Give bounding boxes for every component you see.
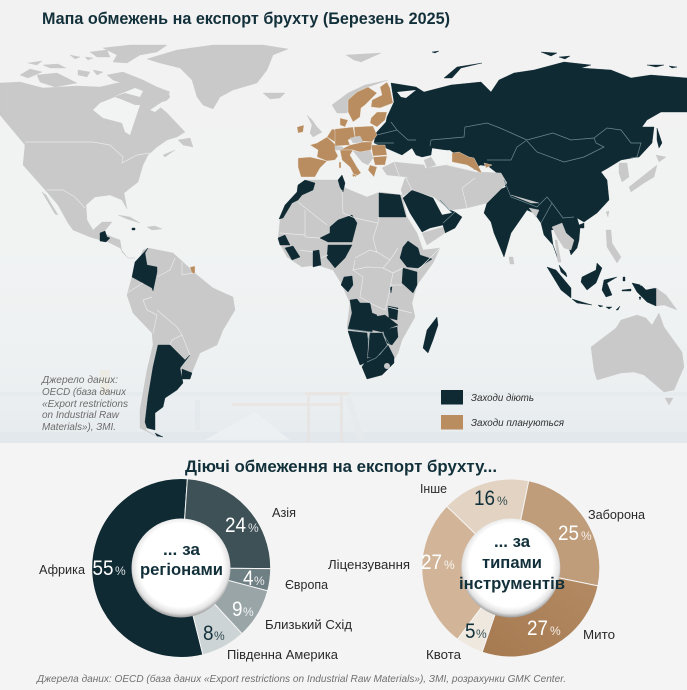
value 27% duty: 27 [527, 617, 548, 640]
region: Africa [278, 180, 440, 379]
value 16%: % [497, 494, 508, 508]
region: small gray enclaves [335, 136, 363, 150]
value 16% [474, 487, 508, 510]
segment: Other 16% [447, 479, 529, 568]
region: Asia gray [382, 155, 684, 405]
center label: інструментів [459, 575, 565, 593]
category labels: Мито [583, 628, 615, 642]
category labels: Азія [272, 506, 296, 520]
donut chart: by regions [39, 478, 353, 662]
value 55% [92, 557, 126, 580]
value 24%: 24 [225, 514, 246, 537]
value 24%: % [248, 521, 259, 535]
segment: Duty 27% [482, 568, 598, 657]
map source note: OECD (база даних [42, 386, 127, 398]
center label: типами [482, 554, 542, 572]
value 8%: 8 [203, 622, 214, 645]
category labels [328, 482, 645, 662]
value 27% licensing: % [444, 558, 455, 572]
value 27% licensing: 27 [421, 551, 442, 574]
map source note: on Industrial Raw [42, 409, 120, 421]
segment: Asia 24% [181, 479, 271, 569]
value 9%: % [243, 605, 254, 619]
value 4%: 4 [243, 567, 254, 590]
value 5% [465, 620, 487, 643]
segment: Ban 25% [511, 481, 600, 586]
center label: ... за [494, 533, 531, 551]
segment: Licensing 27% [422, 506, 511, 639]
value 27% duty [527, 617, 561, 640]
background [0, 0, 687, 443]
segment: Europe 4% [181, 568, 271, 591]
center label: регіонами [140, 561, 223, 579]
center label: ... за [163, 541, 201, 559]
port photo backdrop [0, 370, 687, 443]
value 4%: % [254, 574, 265, 588]
region: North America [0, 45, 288, 258]
category labels: Африка [39, 563, 85, 577]
value 5%: % [476, 627, 487, 641]
value 8%: % [214, 629, 225, 643]
center label [459, 533, 565, 593]
lesotho [384, 363, 390, 369]
donut center [132, 518, 230, 618]
value 5%: 5 [465, 620, 476, 643]
value 4% [243, 567, 265, 590]
value 8% [203, 622, 225, 645]
region: seas inside Eurasia [397, 78, 494, 175]
segment: South America 8% [181, 568, 242, 655]
region: active countries Africa and Americas [100, 175, 656, 437]
category labels: Квота [426, 648, 461, 662]
value 9% [232, 598, 254, 621]
region: planned countries [190, 82, 492, 274]
region: Hudson Bay [93, 88, 170, 135]
value 27% licensing [421, 551, 455, 574]
title: Мапа обмежень на експорт брухту (Березень 2025) [42, 9, 450, 28]
map source note: Джерело даних: [41, 374, 118, 386]
borders in gray regions [25, 142, 656, 355]
map source note: Materials»), ЗМІ. [42, 421, 116, 433]
world map [0, 45, 687, 437]
map source note: «Export restrictions [42, 398, 129, 410]
value 55%: % [115, 564, 126, 578]
region: South America [127, 248, 235, 437]
borders in Eurasia [348, 122, 641, 362]
legend [441, 390, 564, 430]
category labels: Південна Америка [227, 648, 338, 662]
category labels: Інше [420, 482, 447, 496]
value 9%: 9 [232, 598, 242, 621]
region: Russia and Asia active [374, 51, 687, 262]
legend item: active: Заходи діють [471, 392, 534, 404]
segment: Middle East 9% [181, 568, 268, 634]
value 55%: 55 [92, 557, 114, 580]
value 24% [225, 514, 259, 537]
value 25%: % [581, 529, 592, 543]
donut center [461, 518, 560, 618]
charts heading: Діючі обмеження на експорт брухту... [185, 457, 497, 476]
footer source: Джерела даних: OECD (база даних «Export restrictions on Industrial Raw Materials»), ЗМІ, розрахунки GMK Center. [36, 673, 566, 685]
value 27% duty: % [550, 624, 561, 638]
category labels: Ліцензування [328, 558, 410, 572]
category labels: Близький Схід [265, 618, 353, 632]
legend item: planned: Заходи плануються [471, 417, 564, 429]
value 25% [558, 522, 592, 545]
value 16%: 16 [474, 487, 495, 510]
region: Europe gray [307, 53, 388, 165]
value 25%: 25 [558, 522, 579, 545]
segment: Quota 5% [458, 568, 511, 652]
category labels: Європа [285, 578, 328, 592]
center label [140, 541, 223, 579]
map source note [41, 374, 129, 433]
segment: Africa 55% [92, 478, 203, 657]
donut chart: by instrument types [328, 479, 645, 662]
category labels [39, 506, 353, 662]
category labels: Заборона [588, 508, 645, 522]
